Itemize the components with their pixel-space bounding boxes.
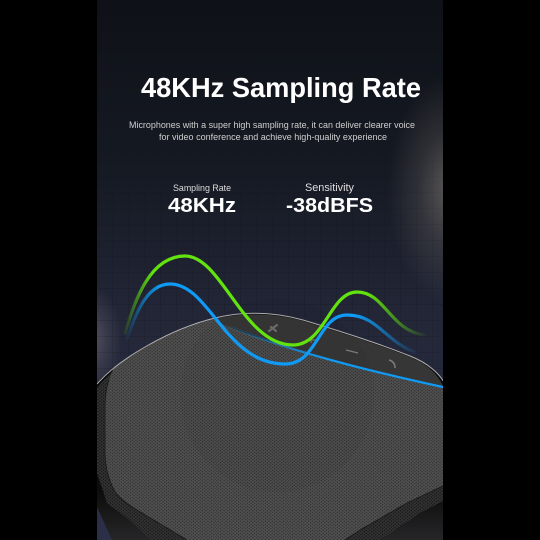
grille inner shadow line	[105, 380, 445, 540]
speaker body	[97, 313, 445, 540]
button icon: phone	[389, 360, 395, 368]
speaker grille	[105, 319, 445, 540]
grille centre circle	[180, 298, 374, 492]
control panel	[213, 314, 443, 386]
speaker device	[97, 298, 445, 540]
stat: sensitivity: Sensitivity	[305, 182, 355, 194]
speaker top rim highlight	[97, 313, 445, 384]
stat: sensitivity	[286, 182, 373, 217]
blue wave	[127, 284, 417, 364]
button icon: minus	[346, 350, 358, 353]
stat: sampling rate: Sampling Rate	[173, 182, 231, 193]
grille outer band	[97, 372, 443, 540]
infographic canvas	[97, 0, 443, 540]
stat: sampling rate: 48KHz	[168, 194, 236, 217]
button icon: plus	[306, 339, 319, 343]
dark panel background	[90, 0, 450, 540]
description text	[129, 120, 415, 143]
title: 48KHz Sampling Rate	[141, 72, 421, 103]
button icon: mute microphone	[269, 325, 277, 331]
thin blue edge line	[230, 327, 443, 387]
stat: sampling rate	[168, 182, 236, 217]
description text: for video conference and achieve high-quality experience	[159, 132, 387, 143]
stat: sensitivity: -38dBFS	[286, 194, 373, 217]
description text: Microphones with a super high sampling rate, it can deliver clearer voice	[129, 120, 415, 131]
green wave	[125, 256, 425, 345]
